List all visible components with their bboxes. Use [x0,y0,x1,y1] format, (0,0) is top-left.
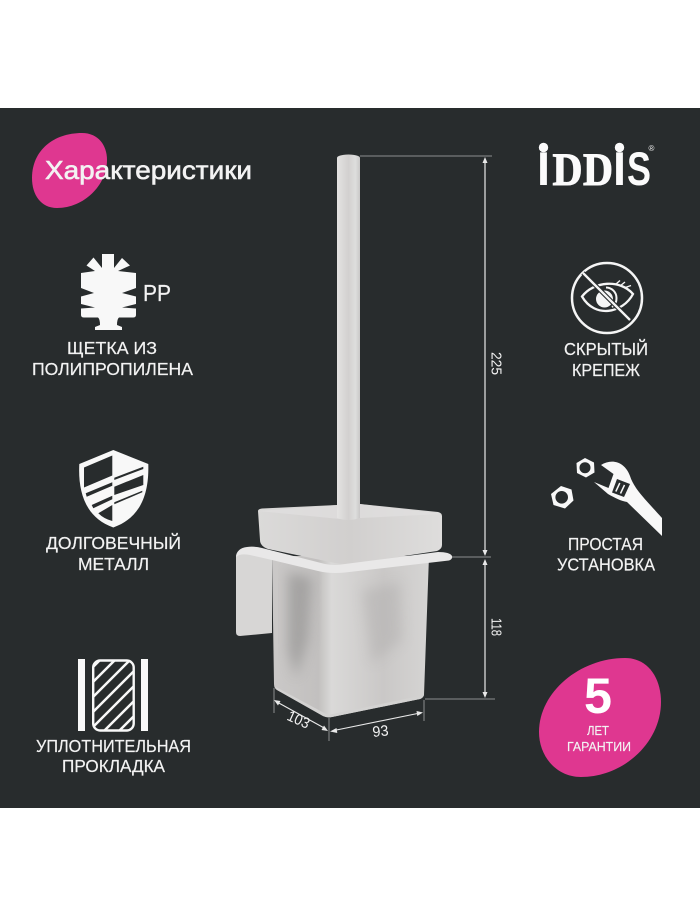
caption: СКРЫТЫЙ [564,338,648,359]
logo: IDDIS: I [537,142,550,195]
product: toilet brush holder [236,154,452,722]
dimension label: 118: 118 [488,618,504,636]
wall plate [236,549,272,636]
dimension lines [274,156,495,741]
icon: wrench and nuts [551,458,662,536]
shelf bracket [236,547,452,573]
logo: IDDIS: ® [648,144,654,153]
pink blob [539,658,661,777]
feature: hidden mount: КРЕПЕЖ [572,360,640,380]
feature: hidden mount [564,263,648,380]
feature: easy install [551,458,662,574]
icon: brush head [81,254,136,330]
PP label: PP [143,280,171,306]
warranty badge [539,658,661,777]
icon: crossed-out eye [572,263,642,333]
feature: durable metal [46,450,181,574]
dimension label: 93: 93 [372,722,389,741]
heading text: Характеристики [45,155,252,185]
caption: ДОЛГОВЕЧНЫЙ [46,532,181,553]
feature: brush: ПОЛИПРОПИЛЕНА [32,359,193,379]
feature: gasket: ПРОКЛАДКА [62,756,165,776]
tray [258,504,442,564]
logo: IDDIS: D [552,144,582,196]
pink blob behind heading [32,133,107,208]
icon: gasket [78,656,148,732]
logo: IDDIS: I [613,142,626,195]
icon: shield [79,450,148,528]
feature: brush [32,254,193,379]
caption: ПРОСТАЯ [568,534,643,554]
dark background panel [0,108,700,808]
caption: УПЛОТНИТЕЛЬНАЯ [36,736,191,756]
brush handle [337,154,360,520]
dimension label: 103: 103 [284,708,312,733]
caption: ЩЕТКА ИЗ [67,338,157,358]
logo: IDDIS [537,142,654,196]
logo: IDDIS: D [583,144,613,196]
warranty caption: ЛЕТ [587,723,609,738]
logo: IDDIS: S [627,142,651,195]
dimension label: 225: 225 [488,352,504,375]
warranty number: 5 [584,668,612,724]
feature: easy install: УСТАНОВКА [557,554,655,574]
warranty badge: ГАРАНТИИ [567,739,631,754]
feature: gasket [36,656,191,776]
frosted glass [270,550,432,722]
heading: Характеристики [32,133,252,208]
feature: durable metal: МЕТАЛЛ [78,554,149,574]
